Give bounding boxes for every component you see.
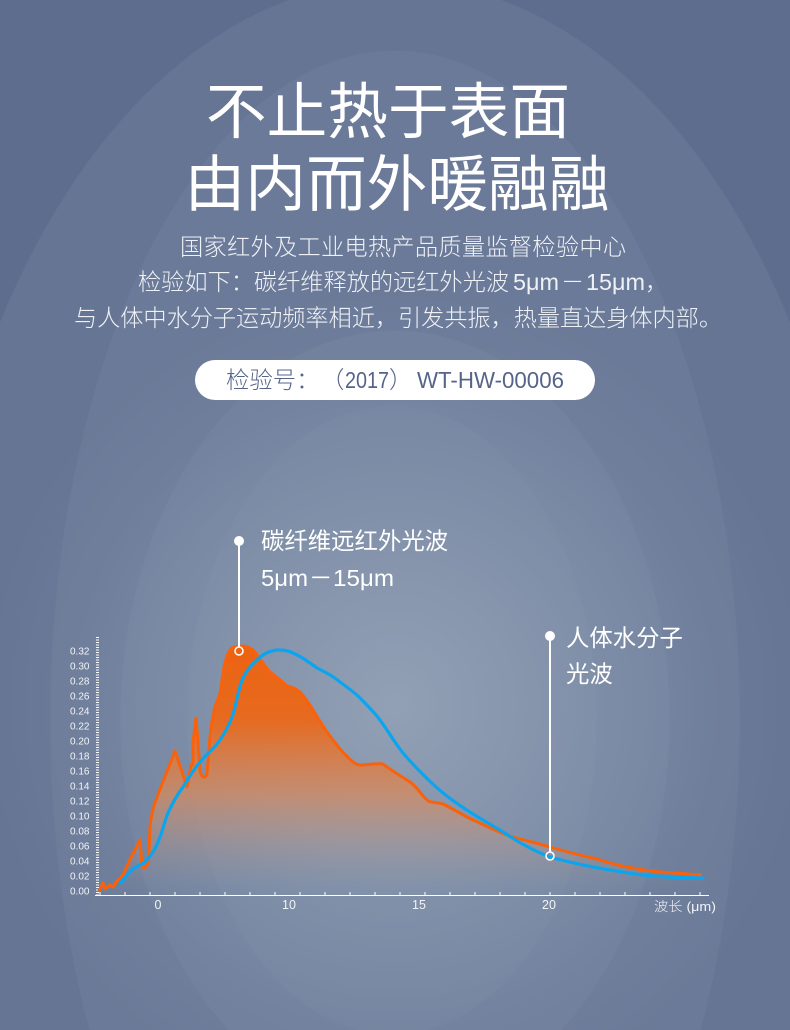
y axis labels: 0.28 (70, 676, 90, 688)
line chart (70, 637, 716, 914)
y axis labels: 0.14 (70, 782, 90, 792)
y axis labels: 0.08 (70, 826, 90, 838)
inspection number pill: 检验号： (226, 367, 320, 393)
description text block: － (561, 269, 584, 295)
y axis labels: 0.24 (70, 706, 90, 718)
callout: carbon fiber far infrared: 碳纤维远红外光波 (261, 528, 448, 554)
description text block: ， (645, 269, 668, 295)
orange curve (99, 646, 702, 891)
y axis labels: 0.22 (70, 722, 90, 732)
title: 由内而外暖融融 (185, 150, 609, 218)
x axis labels: 波长 (μm) (654, 899, 716, 914)
y axis labels: 0.32 (70, 646, 90, 658)
y axis labels: 0.04 (70, 856, 90, 868)
description text block (74, 234, 722, 331)
description text block: 15μm (586, 269, 645, 295)
description text block: 与人体中水分子运动频率相近，引发共振，热量直达身体内部。 (74, 305, 722, 331)
callout: carbon fiber far infrared: 15μm (333, 565, 394, 591)
callout: human water molecule: 光波 (566, 661, 613, 687)
inspection number pill: WT-HW-00006 (417, 367, 564, 393)
x axis (95, 892, 709, 896)
inspection number pill: ） (389, 367, 412, 393)
callout: human water molecule: 人体水分子 (566, 625, 683, 651)
description text block: 5μm (513, 269, 559, 295)
callout: carbon fiber far infrared: 5μm (261, 565, 308, 591)
y axis labels: 0.16 (70, 766, 90, 778)
y axis labels: 0.18 (70, 752, 90, 762)
y axis labels: 0.26 (70, 692, 90, 702)
y axis ticks (96, 637, 99, 895)
y axis labels: 0.02 (70, 872, 90, 882)
description text block: 国家红外及工业电热产品质量监督检验中心 (180, 234, 626, 260)
x axis labels: 0 (155, 898, 162, 912)
x axis labels (155, 898, 716, 914)
y axis labels: 0.12 (70, 796, 90, 808)
y axis labels: 0.06 (70, 842, 90, 852)
x axis labels: 20 (542, 898, 556, 912)
description text block: 检验如下：碳纤维释放的远红外光波 (138, 269, 509, 295)
callout: carbon fiber far infrared: － (309, 565, 332, 591)
orange area (99, 646, 702, 895)
x axis labels: 10 (282, 898, 296, 912)
y axis labels (70, 646, 90, 898)
callout: carbon fiber far infrared (234, 528, 448, 655)
title (185, 78, 609, 218)
callout: human water molecule (545, 625, 683, 860)
y axis labels: 0.10 (70, 812, 90, 822)
y axis labels: 0.30 (70, 662, 90, 672)
y axis labels: 0.20 (70, 736, 90, 748)
x axis labels: 15 (412, 898, 426, 912)
inspection number pill: 2017 (345, 367, 389, 393)
y axis labels: 0.00 (70, 886, 90, 898)
inspection number pill (195, 360, 595, 400)
title: 不止热于表面 (206, 78, 570, 146)
inspection number pill: （ (321, 367, 344, 393)
blue curve (121, 650, 703, 883)
